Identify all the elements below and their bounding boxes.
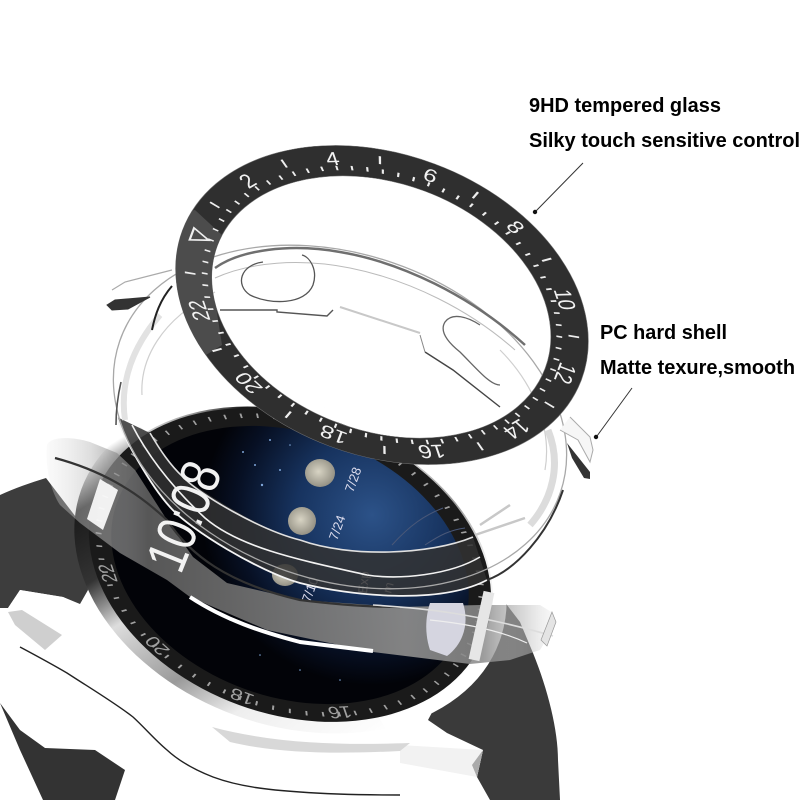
bezel lighter wedge (176, 210, 222, 355)
bezel scale (98, 62, 666, 548)
date labels: 7/28 (342, 465, 364, 494)
callout: glass (529, 95, 800, 214)
clear PC shell (67, 187, 613, 647)
shell left dark rim (116, 382, 121, 425)
hour ticks (121, 96, 643, 514)
pill cutout (443, 316, 500, 385)
label: matte texure: Matte texure,smooth (600, 357, 795, 379)
shell inner ridge lines (220, 310, 333, 316)
bezel scale: 20 (229, 368, 268, 398)
bezel scale: 22 (182, 300, 216, 321)
third layer: grey glass flange (47, 438, 556, 664)
moon phases (272, 459, 335, 586)
triangle marker (190, 228, 211, 246)
case outline line (20, 647, 400, 795)
button cutout (241, 255, 315, 302)
rim highlight lines (150, 433, 473, 552)
bezel scale: 8 (501, 217, 530, 237)
shell lower rim over face (117, 417, 487, 596)
bezel scale: 14 (497, 414, 536, 444)
label: PC hard shell: PC hard shell (600, 322, 727, 344)
shell inner line (142, 292, 547, 470)
watch face (27, 339, 553, 791)
shell left gloss (124, 315, 160, 420)
face dial numbers: 20 (141, 632, 175, 658)
sky dial (72, 378, 508, 752)
right shell lug (560, 417, 593, 462)
bezel scale: 4 (322, 148, 342, 170)
bezel scale: 12 (548, 359, 582, 388)
date labels: Exp (355, 571, 372, 594)
face dial numbers: 16 (325, 702, 354, 721)
bezel scale: 6 (420, 163, 441, 187)
date labels (299, 465, 397, 604)
stars (229, 439, 341, 681)
left shell lug (112, 270, 172, 290)
ceramic bezel ring (175, 145, 589, 465)
date labels: 7/24 (326, 513, 348, 542)
shell right side gloss (530, 430, 554, 525)
bezel scale: 18 (317, 420, 350, 449)
label: 9HD tempered glass: 9HD tempered glass (529, 95, 721, 117)
dial arcs (392, 508, 465, 545)
case lug shading (8, 610, 62, 650)
bezel numerals: 2 (233, 169, 262, 193)
label: silky touch: Silky touch sensitive control (529, 130, 800, 152)
callout: shell (594, 322, 795, 439)
flange upper dark line (55, 458, 400, 607)
silver ring (27, 339, 553, 791)
watch strap: right (428, 592, 560, 800)
case lower right lug (400, 745, 483, 777)
leader line to bezel (533, 163, 583, 214)
minute dots (165, 120, 599, 490)
watch strap: lower left (0, 703, 125, 800)
leader line to shell (594, 388, 632, 439)
shell top rim (215, 248, 525, 345)
face dial numbers: 22 (94, 563, 123, 583)
face dial numbers: 18 (228, 683, 257, 708)
flange highlight lines (190, 597, 373, 651)
shell outer outline (67, 187, 613, 647)
black bezel of the face (45, 354, 535, 776)
bezel scale: 16 (415, 440, 448, 463)
date labels: 7/10 (299, 575, 321, 604)
bezel scale: 10 (548, 289, 582, 310)
time digits: 10:08 (133, 452, 234, 580)
white highlight on ring top and right (34, 345, 546, 785)
date labels: m (379, 580, 397, 595)
watch case body (0, 590, 483, 795)
shell dark lower right rim (487, 490, 563, 580)
face dial numbers (54, 364, 524, 771)
watch strap: left (0, 478, 88, 608)
